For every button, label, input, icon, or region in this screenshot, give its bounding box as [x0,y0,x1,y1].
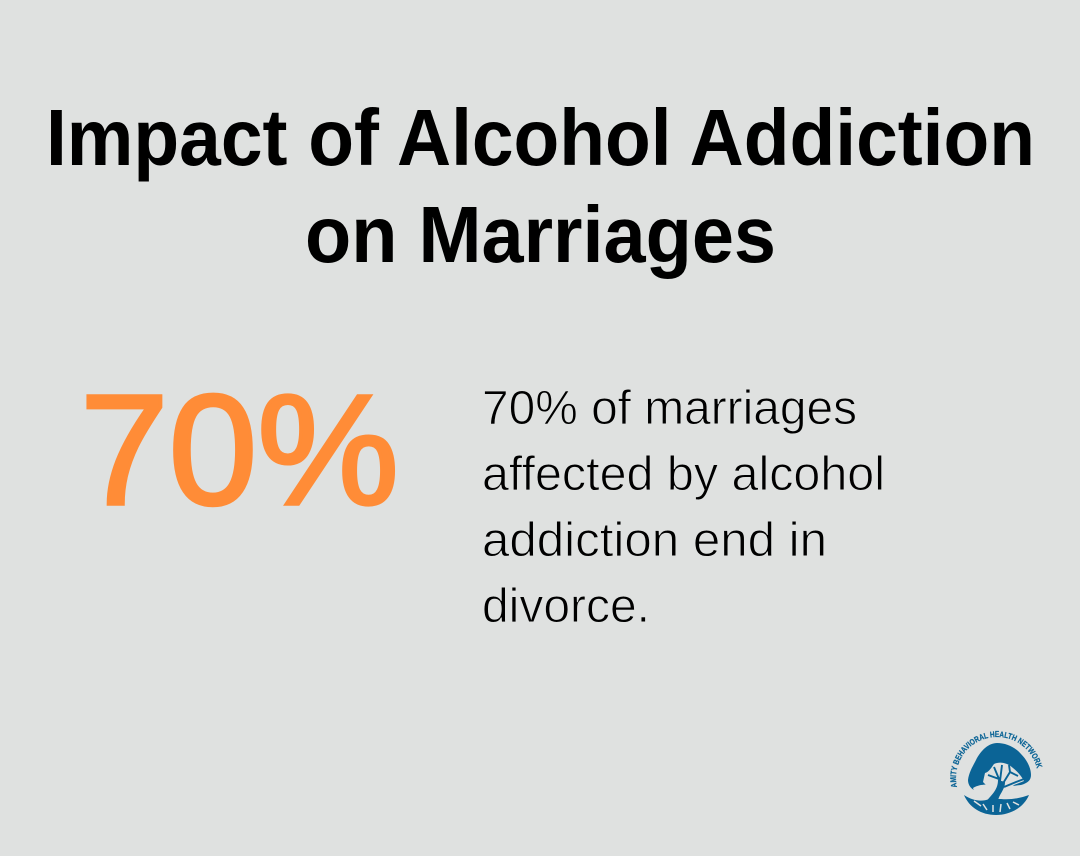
logo root gaps [974,801,1019,812]
logo roots bowl [964,795,1029,815]
title: Impact of Alcohol Addiction [46,93,1035,182]
description text: affected by alcohol [482,448,885,501]
description text: addiction end in [482,514,827,567]
title: on Marriages [305,190,776,279]
logo tree branches [988,765,1024,788]
logo trunk [985,780,1005,803]
description text [482,382,885,633]
description text: divorce. [482,580,650,633]
logo ring text: AMITY BEHAVIORAL HEALTH NETWORK [950,730,1042,788]
logo: Amity Behavioral Health Network [950,730,1042,815]
title [46,93,1035,279]
big stat: 70%: 70% [80,363,399,538]
logo canopy openings [983,763,1024,792]
description text: 70% of marriages [482,382,857,435]
logo lower-left gap under canopy [973,785,994,796]
logo tree canopy [968,743,1031,790]
